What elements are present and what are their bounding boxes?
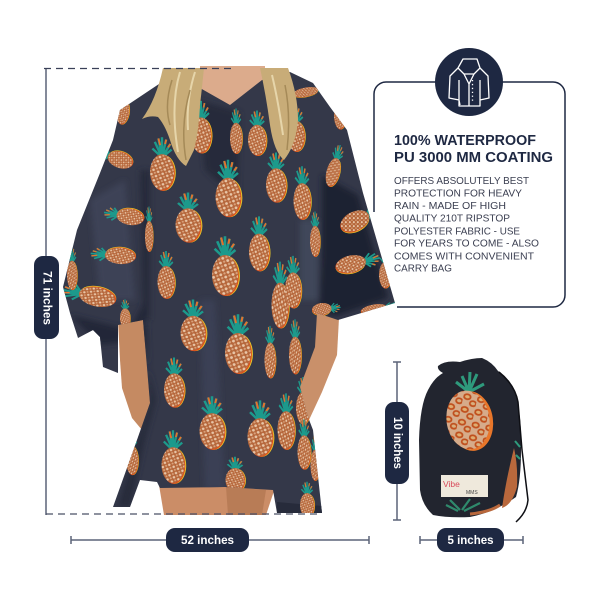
bag side pineapple <box>502 441 520 508</box>
carry bag <box>419 358 528 522</box>
drawstring cord <box>499 372 528 522</box>
width measure <box>71 528 369 552</box>
hair <box>142 68 298 166</box>
bag label <box>441 475 488 497</box>
bag height measure <box>385 362 409 520</box>
panel body text: RAIN - MADE OF HIGH <box>394 201 506 212</box>
info panel <box>374 48 565 307</box>
bag label: Vibe <box>443 479 460 489</box>
width measure: 52 inches <box>181 535 234 547</box>
legs <box>159 485 276 515</box>
panel body text: COMES WITH CONVENIENT <box>394 251 535 262</box>
panel body text: PROTECTION FOR HEAVY <box>394 189 522 200</box>
bottom leaves on bag <box>446 499 480 511</box>
poncho <box>60 72 399 518</box>
left arm and hand <box>118 320 152 430</box>
panel body text: FOR YEARS TO COME - ALSO <box>394 239 539 250</box>
bag width measure <box>420 528 523 552</box>
panel heading: PU 3000 MM COATING <box>394 150 553 166</box>
panel heading: 100% WATERPROOF <box>394 133 536 149</box>
neck <box>200 66 265 108</box>
panel body text <box>394 176 539 275</box>
panel body text: POLYESTER FABRIC - USE <box>394 226 520 237</box>
bottom dashed guide <box>46 513 318 515</box>
right arm and hand <box>298 310 339 420</box>
pineapple print <box>60 83 399 518</box>
fabric shading <box>70 100 388 507</box>
panel heading <box>394 133 553 166</box>
bag label: MMS <box>466 490 478 496</box>
bag height measure: 10 inches <box>391 417 403 469</box>
panel body text: OFFERS ABSOLUTELY BEST <box>394 176 530 187</box>
height pill <box>34 256 59 339</box>
panel body text: CARRY BAG <box>394 264 452 275</box>
bag width measure: 5 inches <box>448 535 494 547</box>
top dashed guide <box>44 68 232 70</box>
height measure line <box>45 69 47 515</box>
panel body text: QUALITY 210T RIPSTOP <box>394 214 510 225</box>
bag pineapple <box>443 372 497 454</box>
icon: raincoat badge <box>435 48 503 116</box>
height pill: 71 inches <box>40 271 52 325</box>
